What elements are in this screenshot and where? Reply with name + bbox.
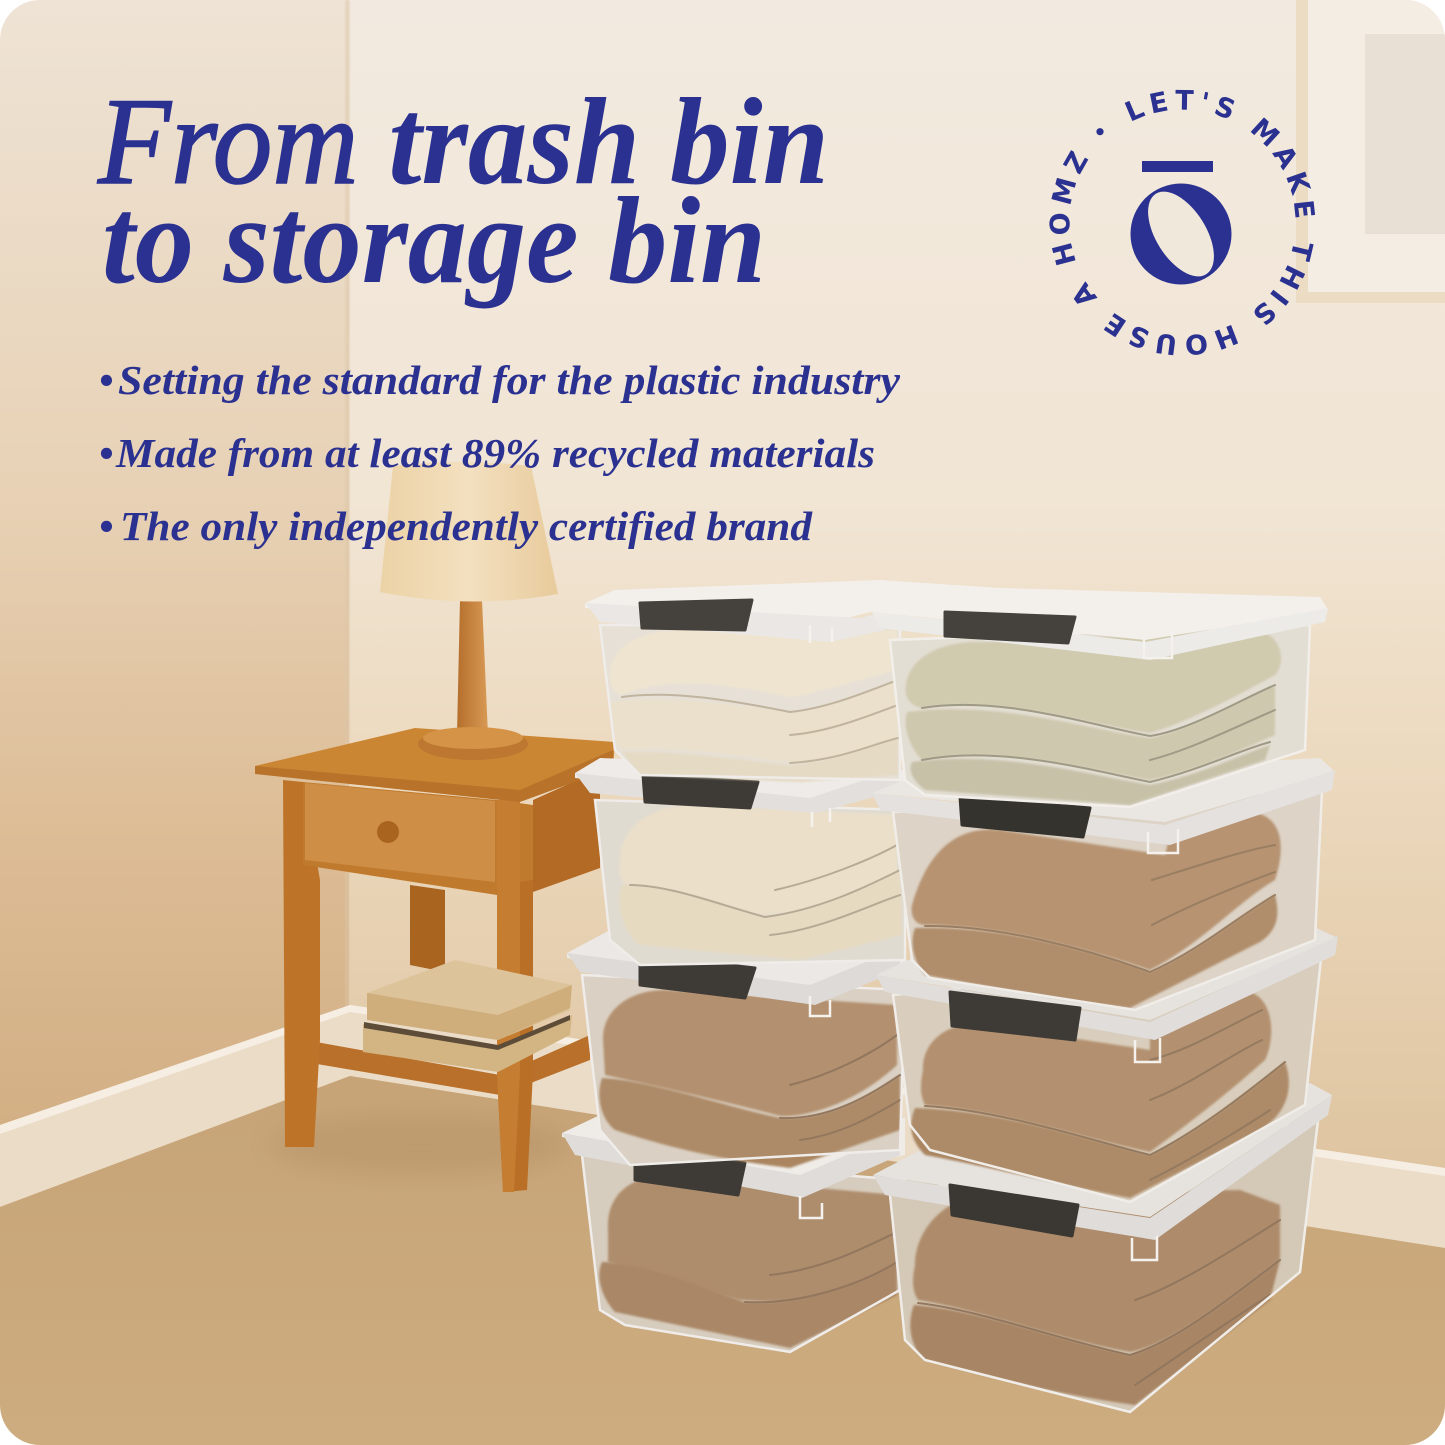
bin: left top: [585, 580, 1000, 782]
bin: right bottom: [873, 1083, 1332, 1412]
bullet: recycled materials: Made from at least 89% recycled materials: [115, 430, 875, 476]
title: [96, 97, 824, 308]
logo: circular tagline: LET'S MAKE THIS HOUSE A HOMZ: [1049, 90, 1316, 356]
benefit bullet list: [99, 357, 901, 549]
nightstand: [255, 728, 615, 1192]
bin: right second: [872, 758, 1335, 1010]
title: to storage bin: [102, 172, 766, 309]
left stack of storage bins: [562, 580, 1000, 1352]
bullet: plastic industry standard: Setting the standard for the plastic industry: [118, 357, 901, 403]
framed picture: [1296, 0, 1445, 303]
bullet: certified brand: The only independently certified brand: [120, 503, 813, 549]
bin: right top: [872, 588, 1328, 807]
title: From trash bin: [97, 73, 829, 210]
logo: ring mark: [1130, 180, 1232, 288]
bullet: recycled materials: •: [99, 430, 113, 476]
right stack of storage bins: [872, 588, 1338, 1412]
books on shelf: [363, 960, 572, 1072]
logo: dot: [1096, 128, 1104, 135]
bin: left bottom: [562, 1115, 905, 1352]
bullet: certified brand: •: [99, 503, 113, 549]
bullet: plastic industry standard: •: [99, 357, 113, 403]
logo: bar: [1142, 161, 1213, 172]
bin: left second: [575, 758, 905, 965]
bin: right third: [876, 925, 1338, 1202]
logo badge: [1049, 90, 1316, 356]
table lamp: [380, 462, 558, 760]
bin: left third: [567, 930, 905, 1168]
